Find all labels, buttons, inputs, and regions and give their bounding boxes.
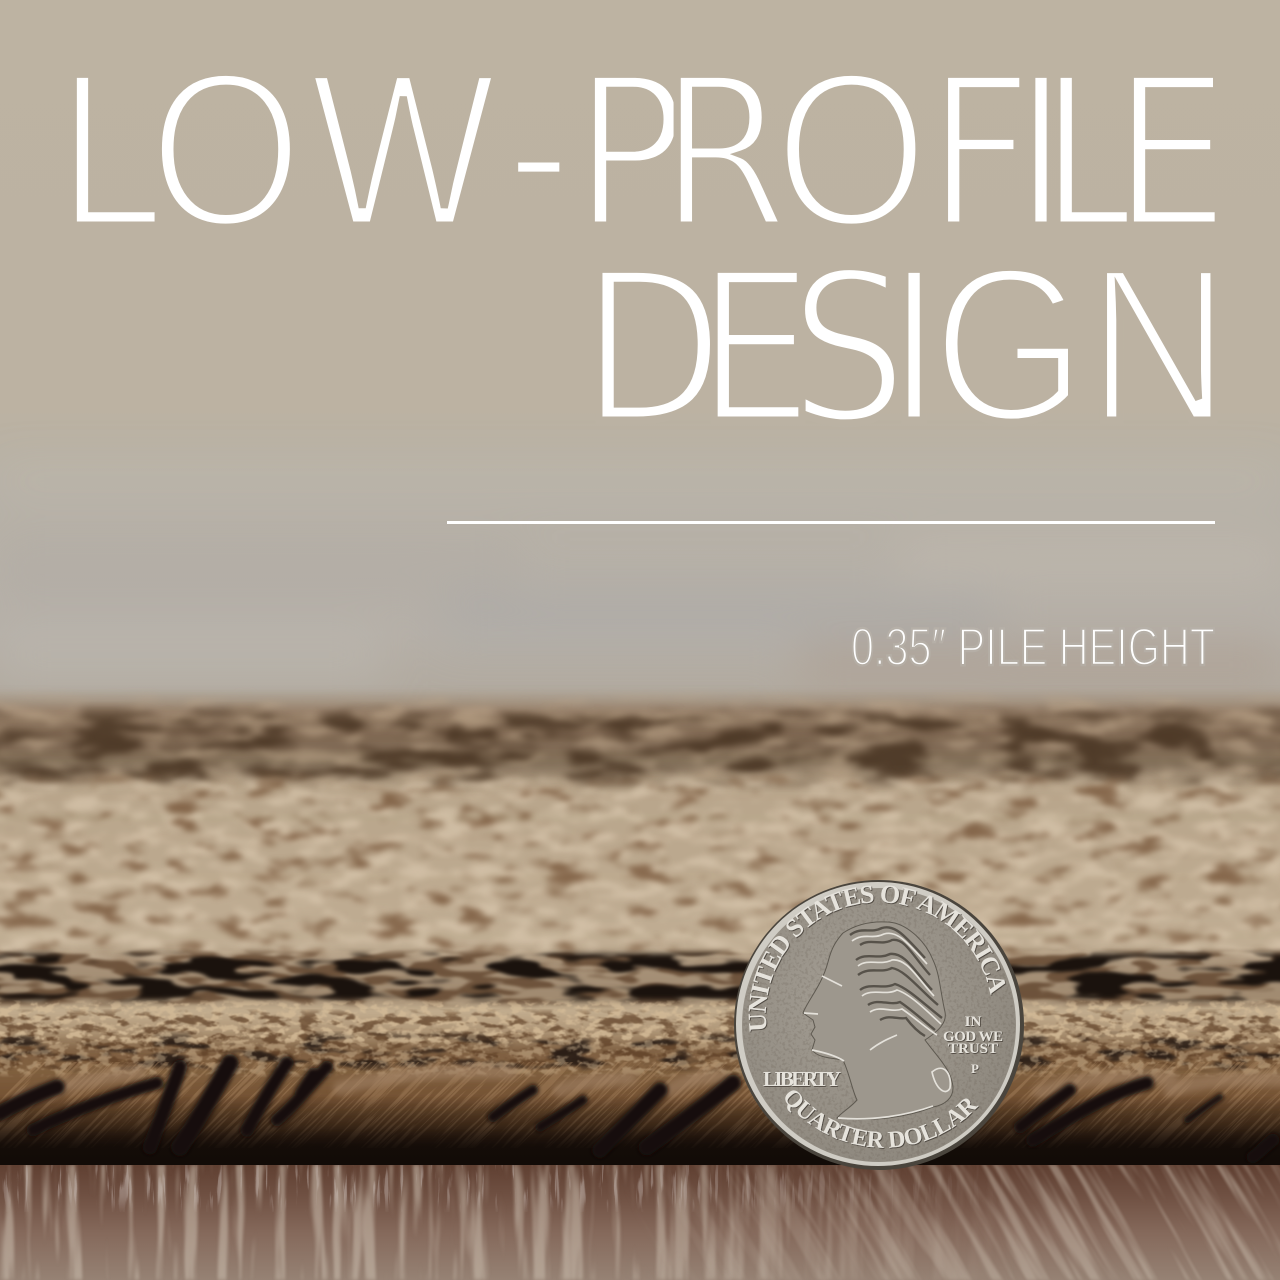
far rug border band bbox=[0, 700, 1280, 786]
background: blurred wall bbox=[0, 0, 1280, 730]
title: - bbox=[506, 28, 572, 273]
title second line: N bbox=[1087, 223, 1230, 468]
title second line: I bbox=[887, 227, 942, 470]
near dark patterned band bbox=[0, 952, 1280, 1004]
coin: Washington bust bbox=[803, 922, 953, 1120]
coin: surface grain bbox=[740, 885, 1020, 1165]
coin: inscriptions: GOD WE bbox=[943, 1029, 1003, 1045]
title: R bbox=[659, 32, 789, 275]
title second line: S bbox=[789, 227, 908, 470]
blurred floor boards behind the rug bbox=[0, 470, 1280, 690]
title: F bbox=[926, 32, 1034, 275]
coin: inscriptions: QUARTER DOLLAR bbox=[785, 1090, 980, 1149]
title: P bbox=[573, 32, 686, 275]
divider rule bbox=[447, 521, 1215, 524]
fuzzy top edge of rug bbox=[0, 1002, 1280, 1075]
coin: inscriptions: UNITED STATES OF AMERICA bbox=[748, 886, 1006, 1033]
coin: inscriptions: TRUST bbox=[948, 1041, 998, 1057]
coin: inscriptions bbox=[748, 886, 1006, 1149]
rug bbox=[0, 688, 1280, 1168]
braid: tan strand highlights bbox=[20, 1071, 1280, 1100]
coin: inscriptions: LIBERTY bbox=[763, 1067, 841, 1091]
title: O bbox=[774, 28, 928, 273]
title: O bbox=[149, 28, 303, 273]
title: L bbox=[55, 32, 159, 275]
wooden floor bbox=[0, 1160, 1280, 1280]
rug field: tan mottled pile bbox=[0, 778, 1280, 958]
coin: inscriptions: IN bbox=[965, 1014, 982, 1030]
floor: slanted wood grain, right side bbox=[690, 1165, 1280, 1280]
title second line: G bbox=[932, 223, 1086, 468]
title: E bbox=[1112, 32, 1230, 275]
title: L bbox=[1039, 32, 1143, 275]
title: I bbox=[1013, 32, 1069, 275]
coin: inscriptions: P bbox=[971, 1061, 979, 1076]
braid: shadow toward the floor bbox=[0, 1095, 1280, 1165]
icon: quarter dollar coin for scale bbox=[734, 880, 1024, 1170]
braided rug edge bbox=[0, 1060, 1280, 1165]
title second line: E bbox=[696, 227, 814, 470]
braid: fine diagonal hair bbox=[0, 1060, 1280, 1150]
braid: dark gaps between strands bbox=[0, 1063, 1273, 1157]
title: W bbox=[310, 28, 496, 273]
coin: hair bbox=[850, 927, 942, 1036]
title second line: D bbox=[581, 227, 725, 470]
floor: vertical wood grain, left side bbox=[0, 1165, 962, 1280]
